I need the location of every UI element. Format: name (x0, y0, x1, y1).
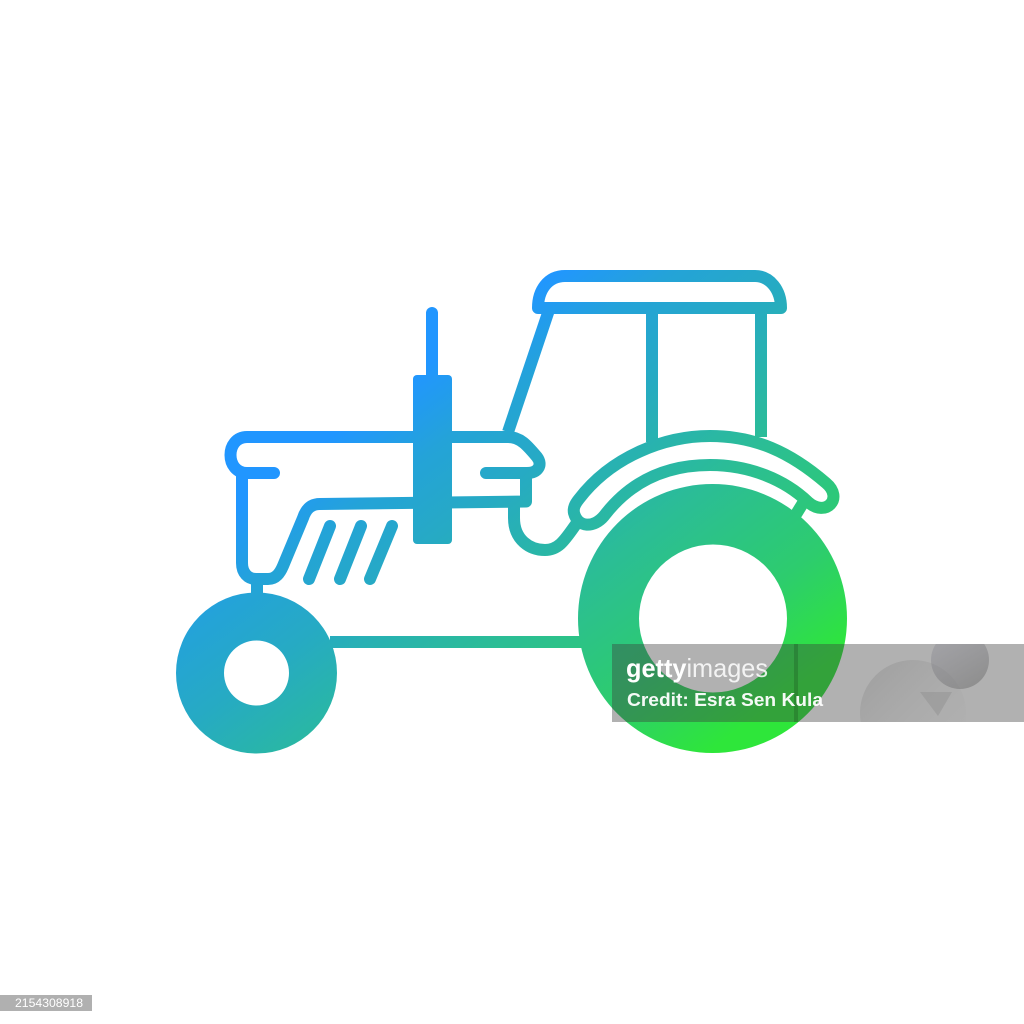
icon: tractor (176, 276, 847, 754)
cab roof (538, 276, 781, 308)
engine vent slats (309, 526, 392, 579)
fender strut (795, 503, 803, 516)
hood (230, 437, 540, 473)
fender (574, 436, 833, 525)
image id number: 2154308918 (15, 998, 83, 1010)
chassis axle (330, 636, 582, 648)
watermark credit text: Credit: Esra Sen Kula (627, 690, 824, 710)
windshield pillar (508, 310, 549, 432)
exhaust pipe (426, 313, 438, 376)
watermark band (612, 644, 1024, 722)
rear wheel (578, 484, 847, 753)
watermark logo text: gettyimages (626, 653, 768, 683)
hydraulic hose (514, 505, 579, 550)
engine body (242, 473, 526, 579)
rear cab pillars (652, 308, 761, 442)
watermark decorative shapes (794, 644, 989, 722)
tractor outline strokes (230, 276, 833, 642)
exhaust stack (413, 375, 452, 544)
front wheel (176, 592, 337, 754)
image id tag (0, 995, 92, 1011)
post to front wheel (251, 579, 263, 600)
